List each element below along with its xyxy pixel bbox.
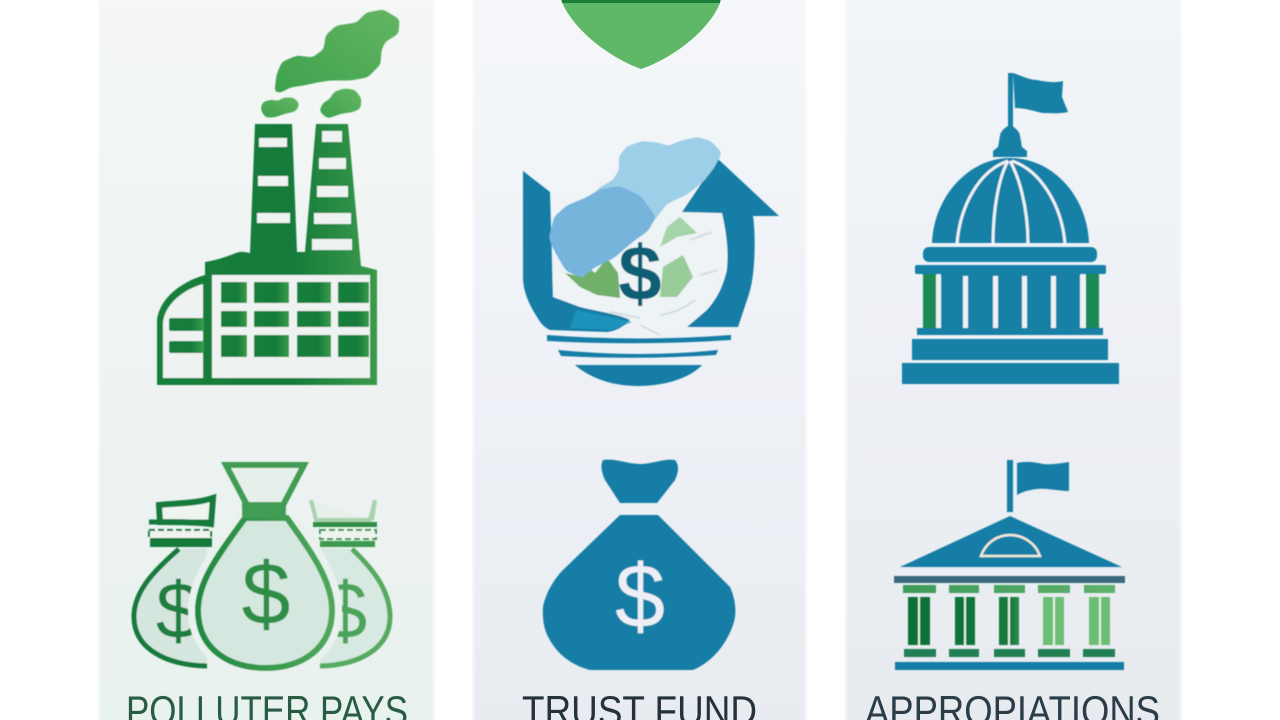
icon: circular fund arrow with clouds and dollar (523, 137, 779, 386)
left bag: $ (156, 566, 200, 655)
panel: trust fund (473, 0, 806, 720)
left bag (134, 498, 213, 666)
right bag (311, 500, 390, 666)
icon: capitol dome with flag (902, 73, 1119, 384)
right bag: $ (323, 566, 367, 655)
icon: circular fund arrow with clouds and dollar: $ (618, 229, 662, 317)
panel: polluter pays (99, 0, 434, 720)
icon: blue money bag (543, 460, 735, 670)
centre bag: $ (242, 544, 290, 643)
icon: factory with smoke (157, 11, 398, 385)
icon: bank building with flag (894, 460, 1125, 670)
icon: green shield tip (561, 0, 721, 69)
icon: three money bags (134, 465, 390, 668)
icon: blue money bag: $ (615, 547, 665, 647)
panel: appropriations (846, 0, 1181, 720)
centre bag (198, 465, 332, 668)
